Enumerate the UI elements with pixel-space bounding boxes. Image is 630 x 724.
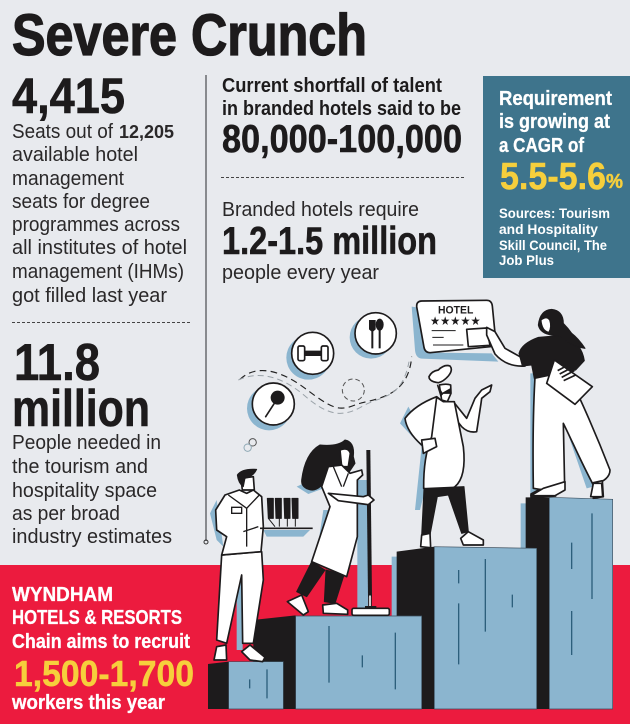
text: workers this year: workers this year xyxy=(11,692,165,714)
figure: waiter head xyxy=(237,469,257,490)
text: seats description: seats for degree xyxy=(12,191,150,213)
text: seats description: 12,205 xyxy=(119,122,174,142)
text: sources xyxy=(499,205,610,268)
icon: key xyxy=(247,383,294,430)
text: Wyndham heading: Chain aims to recruit xyxy=(12,631,190,653)
text: CAGR heading xyxy=(499,88,612,157)
number: CAGR range: 5.5-5.6 xyxy=(500,156,606,198)
column divider xyxy=(204,75,208,544)
icon: dumbbell xyxy=(286,332,334,380)
text: seats description: available hotel xyxy=(12,144,138,166)
panel: red footer band xyxy=(0,565,630,724)
text: CAGR heading: is growing at xyxy=(499,111,610,133)
stat: 11.8 million xyxy=(12,334,172,548)
text: seats description: programmes across xyxy=(12,214,180,236)
stat: current shortfall xyxy=(222,75,462,161)
icon: hotel rating card: HOTEL xyxy=(438,305,473,317)
text: people needed: hospitality space xyxy=(12,480,157,502)
text: sources: and Hospitality xyxy=(499,221,598,237)
text: seats description: all institutes of hotel xyxy=(12,237,187,259)
figure: waiter xyxy=(210,490,313,662)
callout: Wyndham recruitment xyxy=(11,584,194,714)
text: people needed: industry estimates xyxy=(12,526,172,548)
text: seats description: management (IHMs) xyxy=(12,261,184,283)
text: seats description xyxy=(12,121,187,307)
text: people needed: the tourism and xyxy=(12,456,148,478)
text: seats description: management xyxy=(12,168,124,190)
icon: dashed flight path xyxy=(238,357,412,413)
text: Wyndham heading xyxy=(12,584,190,653)
text: seats description: got filled last year xyxy=(12,285,167,307)
figure: woman with clipboard xyxy=(487,309,610,498)
stat: branded hotels requirement xyxy=(222,199,437,284)
text: people needed xyxy=(12,432,172,548)
text: sources: Job Plus xyxy=(499,252,554,268)
figure: woman shoes xyxy=(531,482,603,497)
number: 11.8 million: million xyxy=(12,380,150,438)
number: 4,415: 4,415 xyxy=(12,68,125,124)
text: CAGR heading: a CAGR of xyxy=(499,135,584,157)
stat: seats filled xyxy=(12,68,187,307)
icon: thought bubbles xyxy=(244,439,256,451)
figure: maid body xyxy=(287,450,389,615)
figure: maid head and hair xyxy=(297,440,355,494)
number: 1.2-1.5 million: 1.2-1.5 million xyxy=(222,220,437,263)
text: shortfall heading: Current shortfall of talent xyxy=(222,75,442,97)
text: CAGR heading: Requirement xyxy=(499,88,612,110)
text: Wyndham heading: HOTELS & RESORTS xyxy=(12,607,182,629)
icon: fork and spoon xyxy=(350,313,396,359)
chart-like steps xyxy=(208,497,613,709)
text: seats description: Seats out of xyxy=(12,121,113,143)
figure: chef xyxy=(400,365,492,510)
text: requirement intro: Branded hotels require xyxy=(222,199,419,221)
number: 11.8 million xyxy=(12,334,150,438)
icon: hotel rating card: ★★★★★ xyxy=(430,314,481,328)
text: sources: Sources: Tourism xyxy=(499,205,610,221)
text: people needed: People needed in xyxy=(12,432,161,454)
text: people needed: as per broad xyxy=(12,503,120,525)
number: workers: 1,500-1,700 xyxy=(14,653,194,694)
title: Severe Crunch xyxy=(12,3,367,68)
text: Wyndham heading: WYNDHAM xyxy=(12,584,113,606)
text: requirement outro: people every year xyxy=(222,262,379,284)
text: shortfall heading: in branded hotels said to be xyxy=(222,98,461,120)
number: 11.8 million: 11.8 xyxy=(14,334,100,392)
icon: hotel rating card xyxy=(412,300,498,362)
illustration: hotel staff on rising steps xyxy=(208,300,613,709)
number: shortfall range: 80,000-100,000 xyxy=(222,118,462,161)
number: CAGR range: % xyxy=(606,171,623,193)
figure: chef legs xyxy=(421,487,483,548)
text: shortfall heading xyxy=(222,75,461,120)
panel: CAGR box xyxy=(483,76,630,278)
text: sources: Skill Council, The xyxy=(499,237,607,253)
